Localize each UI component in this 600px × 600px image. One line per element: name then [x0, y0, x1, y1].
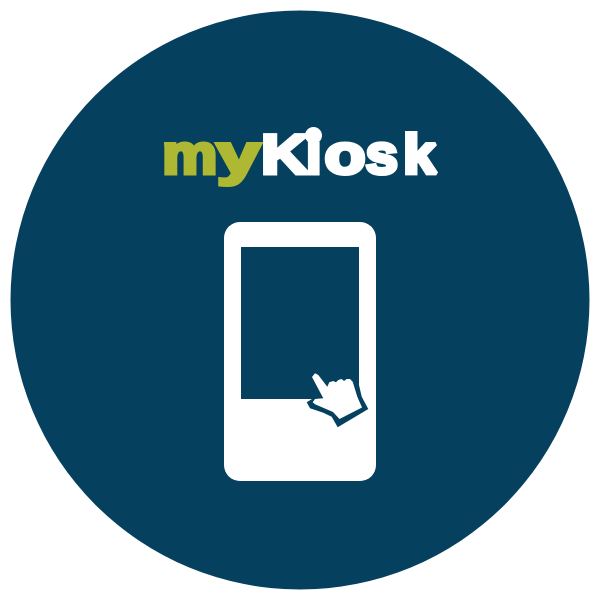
- title word: Kiosk: s: [366, 124, 398, 186]
- title word: Kiosk: k: [403, 124, 437, 186]
- device screen: [241, 247, 359, 399]
- icon: kiosk device: [224, 222, 376, 481]
- hand outline: [307, 385, 368, 427]
- title word: Kiosk: o: [324, 124, 366, 186]
- title word: Kiosk: [261, 122, 437, 186]
- device body: [224, 222, 376, 481]
- title word: Kiosk: K: [261, 123, 309, 185]
- title word: Kiosk: i: [306, 122, 322, 186]
- title word: my: m: [162, 123, 217, 186]
- icon: pointing hand: [307, 373, 368, 427]
- title: myKiosk logo: [162, 122, 437, 186]
- title word: my: y: [217, 124, 261, 186]
- hand fill: [312, 373, 362, 419]
- title word: my: [162, 123, 261, 186]
